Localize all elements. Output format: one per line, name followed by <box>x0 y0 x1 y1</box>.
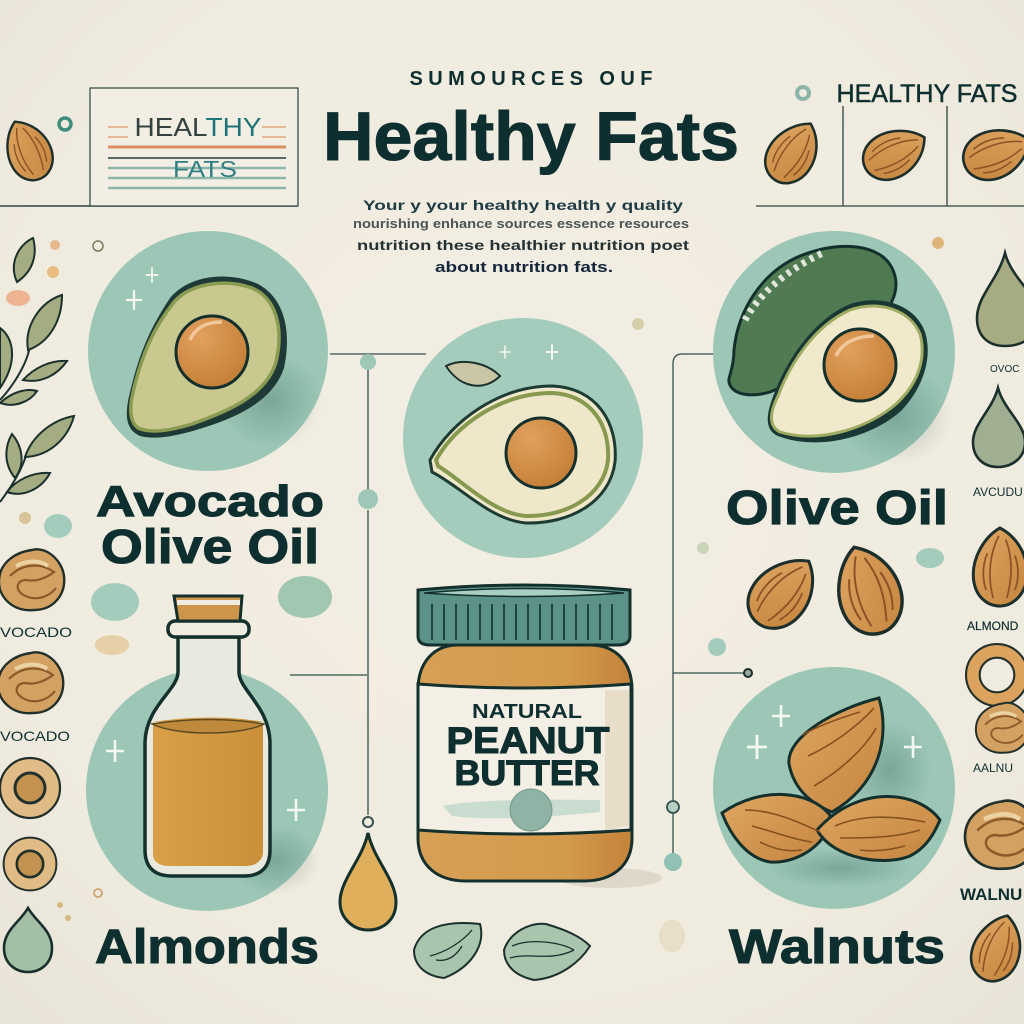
leaf branch left <box>0 238 74 502</box>
right column icons: WALNU <box>960 885 1022 904</box>
right column icons: OVOC <box>990 364 1019 375</box>
icon: almond <box>973 528 1024 606</box>
heading: avocado olive oil: Avocado <box>96 477 324 526</box>
icon: almond <box>964 908 1024 988</box>
bottom leaves <box>414 923 590 980</box>
icon: almond <box>855 117 935 189</box>
panel: almonds cluster <box>713 667 955 909</box>
right column icons: AVCUDU <box>973 485 1023 499</box>
heading: olive oil: Olive Oil <box>726 482 948 535</box>
jar label text: PEANUT <box>446 720 610 761</box>
icon: sparkle <box>904 736 922 758</box>
note card: healthy fats: HEALTHY <box>134 112 262 142</box>
note card: healthy fats <box>90 88 298 206</box>
icon: walnut <box>0 652 63 713</box>
icon: almond top left <box>0 112 61 187</box>
right column icons: AALNU <box>973 761 1013 775</box>
icon: almond <box>956 118 1024 188</box>
icon: ring nut <box>973 651 1021 699</box>
intro text: nourishing enhance sources essence resources <box>353 216 689 231</box>
jar label text: BUTTER <box>454 754 600 793</box>
peanut butter jar <box>418 585 662 888</box>
note card: healthy fats: FATS <box>173 156 237 182</box>
intro text: Your y your healthy health y quality <box>363 197 683 213</box>
title: Healthy Fats <box>323 98 739 175</box>
icon: orange blossom <box>6 290 30 306</box>
heading: avocado olive oil: Olive Oil <box>101 521 319 574</box>
icon: nut <box>965 801 1024 869</box>
title: SUMOURCES OUF <box>410 68 652 90</box>
left column icons <box>0 549 72 972</box>
icon: seed <box>973 388 1024 467</box>
icon: sparkle <box>546 344 558 360</box>
top right header strip: HEALTHY FATS <box>836 80 1018 108</box>
icon: almond <box>825 538 911 642</box>
left column icons: VOCADO <box>0 624 72 640</box>
icon: walnut <box>0 549 64 610</box>
icon: sparkle <box>146 267 158 283</box>
icon: small ring <box>797 87 809 99</box>
icon: almond <box>736 544 830 641</box>
intro text: nutrition these healthier nutrition poet <box>357 237 689 253</box>
icon: sparkle <box>106 740 124 762</box>
icon: sparkle <box>747 735 767 759</box>
icon: sparkle <box>126 290 142 310</box>
left column icons: VOCADO <box>0 728 70 744</box>
heading: avocado olive oil <box>96 477 324 574</box>
intro text: about nutrition fats. <box>435 259 613 276</box>
small decorative blobs <box>19 237 944 952</box>
icon: almond <box>756 112 830 192</box>
icon: walnut <box>0 758 60 818</box>
icon: walnut <box>4 838 56 890</box>
jar label text <box>446 701 610 793</box>
panel: avocado centre <box>403 318 643 558</box>
icon: seed <box>4 908 52 972</box>
top right header strip <box>756 80 1024 206</box>
right column icons: ALMOND <box>967 619 1019 633</box>
panel: avocado right, olive oil <box>713 231 955 473</box>
icon: sparkle <box>287 799 305 821</box>
icon: leaf <box>446 362 500 386</box>
panel: avocado left <box>88 231 328 471</box>
icon: small ring <box>59 118 71 130</box>
icon: nut <box>976 703 1024 753</box>
icon: sparkle <box>500 345 510 359</box>
icon: seed <box>977 253 1024 346</box>
jar label text: NATURAL <box>472 701 582 723</box>
heading: walnuts: Walnuts <box>729 921 945 974</box>
oil drop <box>340 833 396 930</box>
top left header panel <box>0 88 298 206</box>
intro text <box>353 197 689 276</box>
right column icons <box>960 253 1024 988</box>
heading: almonds: Almonds <box>95 921 319 974</box>
icon: sparkle <box>772 705 790 727</box>
almonds middle right <box>736 538 911 642</box>
panel: olive oil bottle <box>86 596 328 911</box>
connector lines <box>290 354 752 871</box>
